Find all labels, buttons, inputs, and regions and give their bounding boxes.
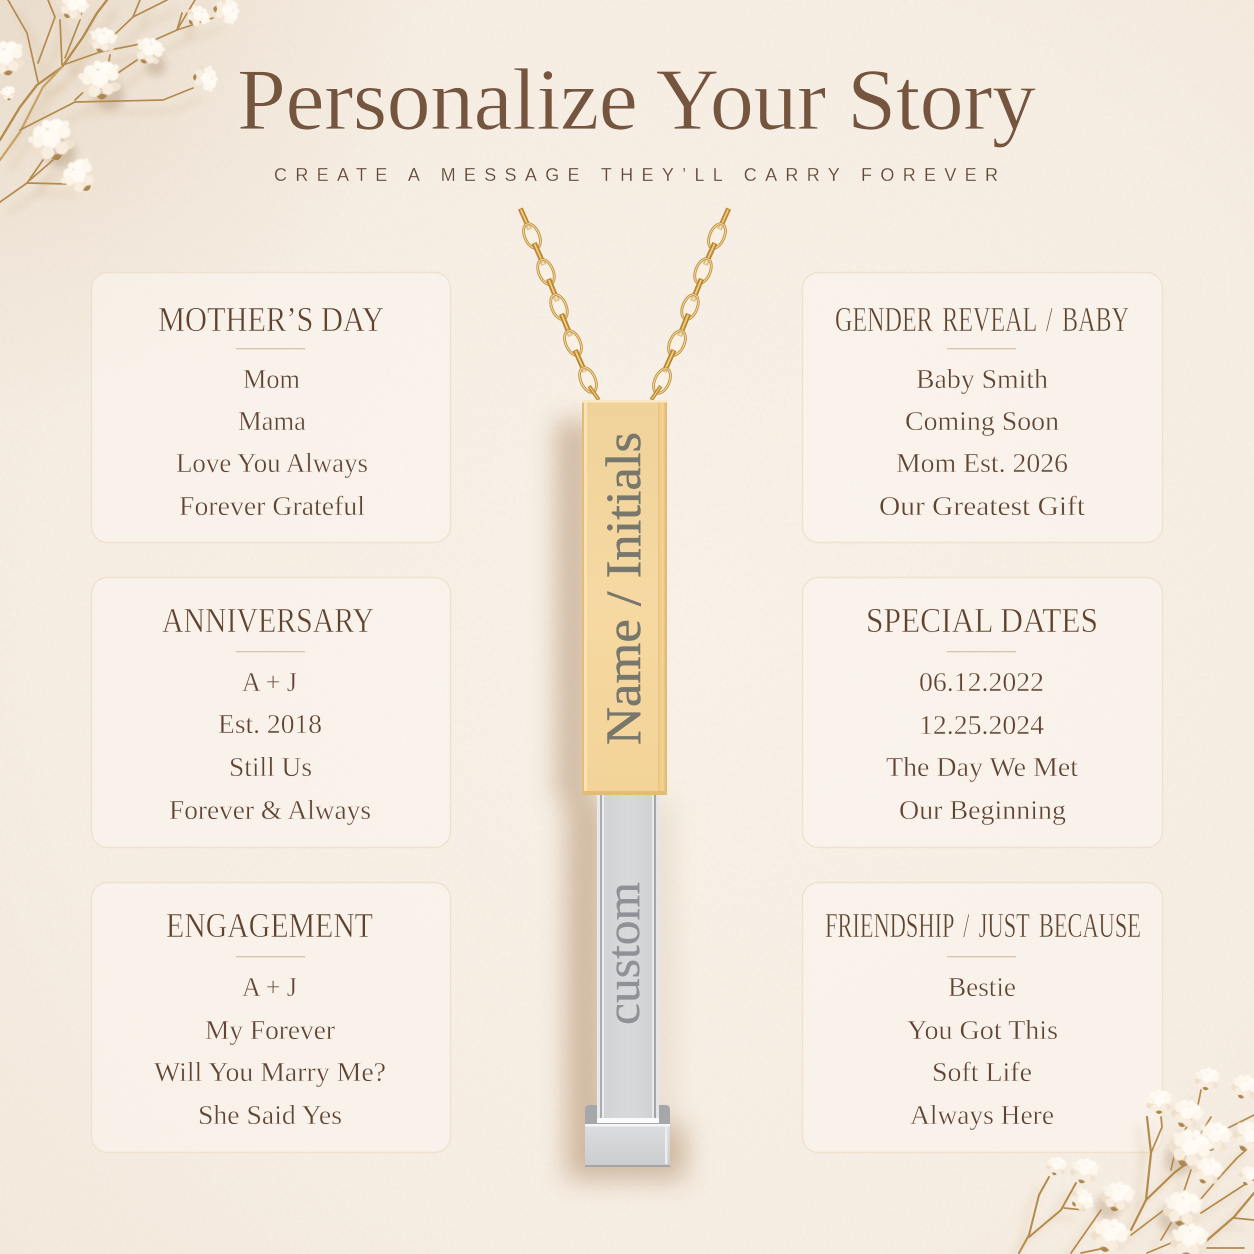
list: Coming Soon xyxy=(905,406,1060,436)
engraving: Name / Initials: Name / Initials xyxy=(595,432,651,745)
gold bar xyxy=(582,400,667,795)
list: A + J xyxy=(242,667,297,697)
list: Bestie xyxy=(948,972,1016,1002)
list: Our Beginning xyxy=(899,795,1066,825)
list: A + J xyxy=(242,972,297,1002)
silver bar xyxy=(597,790,659,1123)
list: My Forever xyxy=(205,1015,335,1045)
list: 12.25.2024 xyxy=(919,710,1045,740)
heading: ENGAGEMENT xyxy=(166,906,373,945)
list xyxy=(176,364,368,521)
list: Mom xyxy=(243,364,300,394)
list: Mama xyxy=(238,406,306,436)
heading: GENDER REVEAL / BABY xyxy=(835,300,1129,339)
list: Forever & Always xyxy=(169,795,371,825)
heading: MOTHER’S DAY xyxy=(158,300,384,339)
list xyxy=(907,972,1058,1130)
subtitle: CREATE A MESSAGE THEY’LL CARRY FOREVER xyxy=(274,165,998,185)
panel: Engagement xyxy=(92,882,450,1152)
list xyxy=(879,364,1086,521)
heading: ANNIVERSARY xyxy=(162,601,374,640)
title: Personalize Your Story xyxy=(237,52,1036,149)
pendant shadow xyxy=(556,420,686,1180)
heading: SPECIAL DATES xyxy=(866,601,1098,640)
necklace chain xyxy=(520,209,729,400)
list: Baby Smith xyxy=(916,364,1049,394)
silver end cap front xyxy=(585,1124,670,1167)
engraving: custom: custom xyxy=(597,882,650,1025)
list xyxy=(154,972,386,1130)
list: 06.12.2022 xyxy=(919,667,1044,697)
list: The Day We Met xyxy=(886,752,1079,782)
list: Soft Life xyxy=(932,1057,1032,1087)
list: Est. 2018 xyxy=(218,709,322,739)
list: She Said Yes xyxy=(198,1100,342,1130)
list: You Got This xyxy=(907,1015,1058,1045)
flower sprig: bottom right xyxy=(1010,1065,1254,1254)
list xyxy=(886,667,1079,825)
panel: Anniversary xyxy=(92,578,450,848)
panel: Special Dates xyxy=(802,578,1162,848)
silver end cap back xyxy=(585,1105,670,1135)
list xyxy=(169,667,371,825)
panel: Mother's Day xyxy=(92,272,450,542)
list: Always Here xyxy=(910,1100,1054,1130)
list: Will You Marry Me? xyxy=(154,1057,386,1087)
list: Still Us xyxy=(229,752,312,782)
flower sprig: top left xyxy=(0,0,241,213)
list: Mom Est. 2026 xyxy=(896,448,1068,478)
list: Our Greatest Gift xyxy=(879,491,1086,521)
list: Forever Grateful xyxy=(179,491,365,521)
list: Love You Always xyxy=(176,448,368,478)
panel: Friendship / Just Because xyxy=(802,882,1162,1152)
panel: Gender Reveal / Baby xyxy=(802,272,1162,542)
